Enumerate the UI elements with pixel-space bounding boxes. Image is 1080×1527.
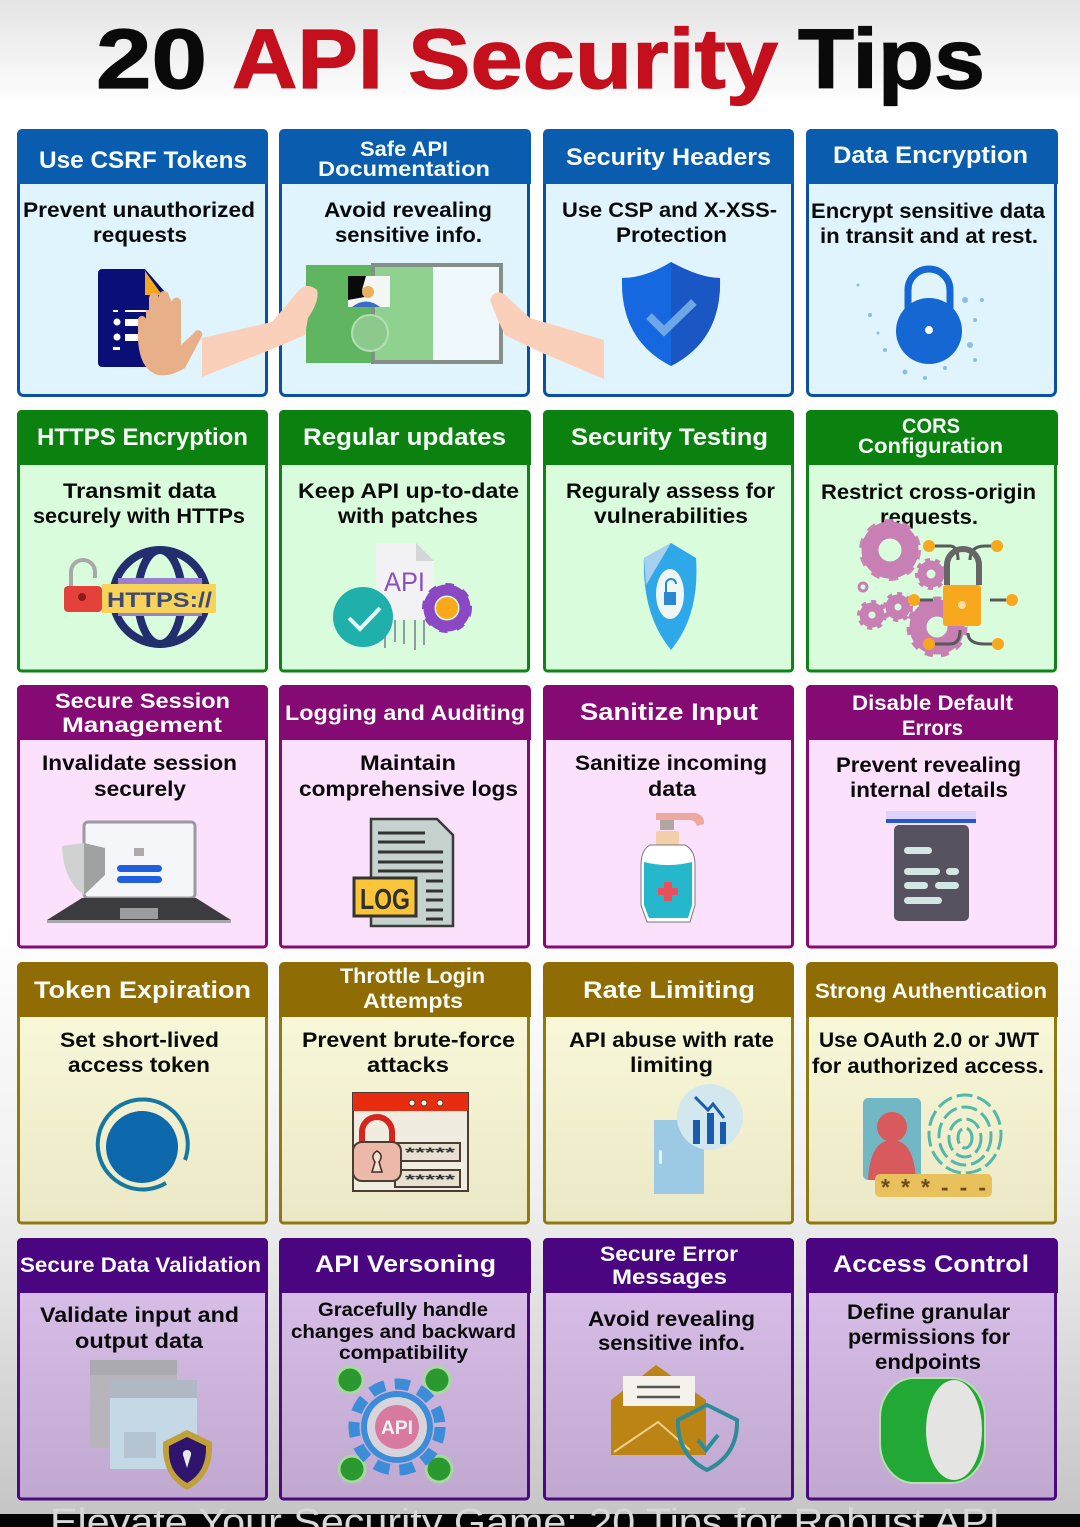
description: Keep API up-to-date: [298, 480, 519, 503]
title: [96, 12, 985, 106]
description: requests.: [880, 506, 978, 529]
heading: Attempts: [363, 990, 463, 1013]
description: Gracefully handle: [318, 1300, 488, 1321]
description: Prevent unauthorized: [23, 199, 255, 222]
description: Use CSP and X-XSS-: [562, 199, 777, 222]
heading: Secure Data Validation: [20, 1254, 261, 1277]
icon: API gear and green nodes: API: [381, 1418, 413, 1439]
panel: Rate Limiting: [543, 962, 794, 1223]
description: [811, 200, 1045, 248]
description: Restrict cross-origin: [821, 481, 1036, 504]
description: [298, 480, 519, 528]
description: Set short-lived: [60, 1029, 219, 1052]
description: [291, 1300, 516, 1364]
description: Avoid revealing: [588, 1308, 755, 1331]
heading: Use CSRF Tokens: [39, 147, 247, 174]
heading: [600, 1243, 738, 1289]
description: limiting: [630, 1054, 713, 1077]
description: Sanitize incoming: [575, 752, 767, 775]
icon: login window with padlock: *****: [405, 1144, 456, 1160]
description: changes and backward: [291, 1322, 516, 1343]
icon: API document, check and gear: API: [384, 567, 425, 597]
description: requests: [93, 224, 187, 247]
icon: API gear and green nodes: [337, 1367, 452, 1482]
heading: Errors: [902, 717, 963, 740]
description: Validate input and: [40, 1304, 239, 1327]
description: [299, 752, 518, 801]
description: comprehensive logs: [299, 778, 518, 801]
icon: document and stop hand: [98, 269, 202, 375]
description: [575, 752, 767, 801]
heading: Security Headers: [566, 144, 771, 171]
heading: [340, 965, 485, 1013]
panel: Sanitize Input: [543, 685, 794, 947]
heading: [55, 690, 230, 737]
heading: Access Control: [833, 1251, 1029, 1278]
heading: Safe API: [360, 138, 448, 161]
panel: Access Control: [806, 1238, 1058, 1499]
icon: padlock with particles: [856, 269, 984, 380]
description: data: [648, 778, 696, 801]
description: vulnerabilities: [594, 505, 748, 528]
icon: log document: [354, 819, 453, 926]
panel: Security Headers: [543, 129, 794, 396]
description: Prevent brute-force: [302, 1029, 515, 1052]
heading: [852, 692, 1013, 740]
panel: Security Testing: [543, 410, 794, 671]
description: Define granular: [847, 1301, 1010, 1324]
heading: Documentation: [318, 158, 490, 181]
heading: Rate Limiting: [583, 977, 755, 1004]
description: [562, 199, 777, 247]
icon: dark error document: [886, 811, 976, 921]
panel: Throttle Login Attempts: [279, 962, 531, 1223]
description: permissions for: [848, 1326, 1010, 1349]
heading: Secure Error: [600, 1243, 738, 1266]
icon: login window with padlock: *****: [405, 1171, 456, 1187]
description: sensitive info.: [335, 224, 482, 247]
heading: [858, 415, 1003, 458]
description: [302, 1029, 515, 1077]
description: sensitive info.: [598, 1332, 745, 1355]
description: endpoints: [875, 1351, 981, 1374]
panel: Safe API Documentation: [202, 129, 604, 396]
icon: globe and HTTPS lock: [64, 550, 216, 644]
icon: log document: LOG: [360, 884, 410, 916]
icon: token circle: [98, 1099, 188, 1189]
heading: Data Encryption: [833, 142, 1028, 169]
description: [566, 480, 775, 528]
title: Security: [408, 12, 778, 106]
description: [836, 754, 1021, 802]
description: for authorized access.: [812, 1055, 1044, 1078]
description: Use OAuth 2.0 or JWT: [819, 1029, 1039, 1052]
title: 20: [96, 12, 207, 106]
panel: CORS Configuration: [806, 410, 1058, 671]
heading: Configuration: [858, 435, 1003, 458]
panel: Use CSRF Tokens: [17, 129, 268, 396]
heading: Regular updates: [303, 424, 506, 451]
description: attacks: [367, 1054, 449, 1077]
heading: Sanitize Input: [580, 699, 758, 726]
icon: ID, fingerprint and password: [863, 1095, 1001, 1200]
description: [60, 1029, 219, 1077]
description: Protection: [616, 224, 727, 247]
icon: globe and HTTPS lock: HTTPS://: [107, 589, 212, 612]
description: Reguraly assess for: [566, 480, 775, 503]
description: [23, 199, 255, 247]
icon: hands holding passport: [202, 265, 604, 379]
heading: Logging and Auditing: [285, 702, 525, 725]
description: [588, 1308, 755, 1355]
description: securely: [94, 778, 186, 801]
description: output data: [75, 1330, 203, 1353]
heading: Messages: [612, 1266, 727, 1289]
heading: HTTPS Encryption: [37, 424, 248, 451]
description: [42, 752, 237, 801]
panel: Strong Authentication: [806, 962, 1058, 1223]
heading: CORS: [902, 415, 960, 438]
icon: device and falling chart: [654, 1084, 743, 1194]
description: compatibility: [339, 1343, 468, 1364]
heading: Management: [62, 714, 222, 737]
panel: API Versoning: [279, 1238, 531, 1499]
heading: [318, 138, 490, 181]
panel: Logging and Auditing: [279, 685, 531, 947]
icon: laptop with login and shield: [47, 822, 231, 923]
title: Tips: [798, 12, 985, 106]
panel: Secure Error Messages: [543, 1238, 794, 1499]
heading: API Versoning: [315, 1251, 496, 1278]
icon: windows and shield: [90, 1360, 212, 1490]
panel: Regular updates: [279, 410, 531, 671]
description: [812, 1029, 1044, 1078]
title: API: [232, 12, 383, 106]
description: in transit and at rest.: [820, 225, 1038, 248]
description: API abuse with rate: [569, 1029, 774, 1052]
panel: Data Encryption: [806, 129, 1058, 396]
panel: Secure Data Validation: [17, 1238, 268, 1499]
panel: Token Expiration: [17, 962, 268, 1223]
description: [569, 1029, 774, 1077]
description: Avoid revealing: [324, 199, 492, 222]
description: with patches: [337, 505, 478, 528]
description: [821, 481, 1036, 529]
panel: Disable Default Errors: [806, 685, 1058, 947]
icon: sanitizer bottle: [641, 813, 704, 922]
icon: gears, padlock and nodes: [859, 522, 1018, 655]
description: internal details: [850, 779, 1008, 802]
description: [847, 1301, 1010, 1374]
description: access token: [68, 1054, 210, 1077]
heading: Throttle Login: [340, 965, 485, 988]
panel: Secure Session Management: [17, 685, 268, 947]
panel: HTTPS Encryption: [17, 410, 268, 671]
icon: ID, fingerprint and password: ***---: [881, 1174, 986, 1200]
description: Transmit data: [63, 480, 216, 503]
heading: Token Expiration: [34, 977, 251, 1004]
icon: envelope and shield: [611, 1365, 737, 1470]
description: Prevent revealing: [836, 754, 1021, 777]
icon: login window with padlock: [353, 1093, 468, 1191]
description: Invalidate session: [42, 752, 237, 775]
description: Maintain: [360, 752, 456, 775]
heading: Disable Default: [852, 692, 1013, 715]
heading: Security Testing: [571, 424, 768, 451]
description: [40, 1304, 239, 1353]
icon: shield with check: [622, 262, 720, 366]
description: Encrypt sensitive data: [811, 200, 1045, 223]
icon: API document, check and gear: [333, 543, 469, 650]
heading: Secure Session: [55, 690, 230, 713]
icon: green cylinder: [880, 1378, 985, 1483]
description: securely with HTTPs: [33, 505, 245, 528]
icon: shield with open lock: [644, 543, 696, 650]
heading: Strong Authentication: [815, 980, 1047, 1003]
description: [324, 199, 492, 247]
description: [33, 480, 245, 528]
